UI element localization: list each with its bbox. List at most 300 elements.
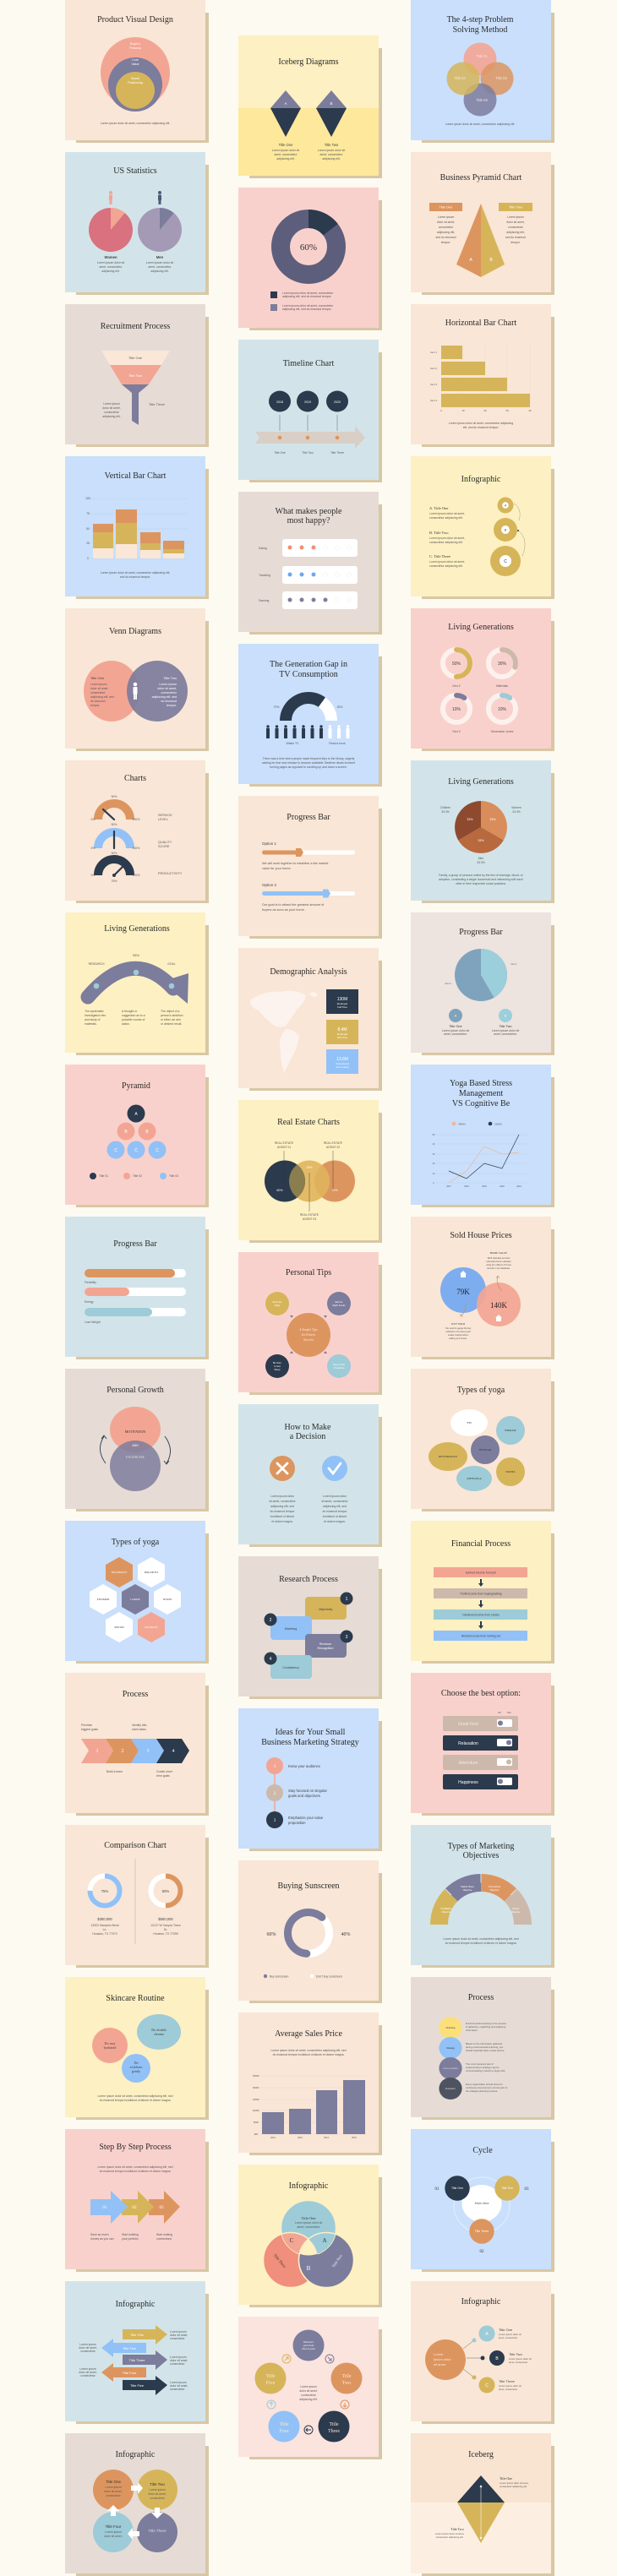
arrow descriptions: consectetur	[170, 2362, 185, 2366]
four circles: dolor sit amet,	[104, 2535, 123, 2538]
list: A. Title One	[429, 506, 448, 510]
addresses: $500,000	[158, 1917, 173, 1921]
chevron steps	[81, 1739, 189, 1763]
tip bubbles: to Get	[274, 1364, 281, 1368]
line chart: 2020	[500, 1185, 505, 1188]
descriptions: Lorem ipsum dolor	[270, 1495, 295, 1498]
bar chart	[253, 2074, 367, 2139]
iceberg B	[316, 90, 347, 137]
tip bubbles: Be Sure	[273, 1361, 281, 1364]
gauge: quality score: QUALITY	[158, 841, 172, 844]
segment labels: Objective	[463, 1888, 472, 1892]
iceberg B: B	[330, 101, 333, 106]
circle pyramid: A	[134, 1112, 138, 1117]
overlapping circles: AND	[132, 1444, 139, 1447]
list: C. Title Three	[429, 554, 450, 558]
funnel labels: Title Three	[149, 402, 166, 406]
agent labels: REAL ESTATE	[324, 1141, 343, 1145]
stage labels	[85, 954, 183, 1026]
descriptions: incididunt ut labore	[270, 1515, 294, 1518]
four circles: consectetur	[150, 2497, 166, 2500]
pie chart: Item 1	[511, 963, 517, 966]
title: Personal Growth	[106, 1386, 164, 1395]
overlapping circles: MOTIVATION	[125, 1430, 145, 1434]
title: Types of yoga	[457, 1386, 505, 1395]
line chart: 40	[433, 1143, 435, 1146]
nested ellipses: Buyer's	[130, 42, 140, 46]
labels: Title Three	[330, 451, 344, 455]
circle steps	[439, 2017, 462, 2099]
labels: adipiscing elit,	[437, 231, 455, 234]
center text: consectetur	[301, 2394, 317, 2397]
caption: do eiusmod tempor incididunt ut labore et dolore magna.	[100, 2099, 171, 2102]
stage labels: and study of	[85, 1018, 101, 1021]
gauge: productivity: 100%	[133, 874, 139, 877]
main bubble	[425, 2339, 466, 2380]
annotations: selling your house.	[449, 1337, 467, 1340]
cycle ring	[454, 2177, 510, 2233]
venn circles	[265, 1161, 355, 1201]
card: Average Sales Price	[238, 2012, 379, 2153]
pyramid	[456, 204, 505, 277]
pie labels: 33.3%	[441, 810, 450, 814]
bar chart: 2012	[270, 2136, 276, 2139]
gauge: quality score: 0%	[91, 847, 95, 850]
stacked bar chart: 100	[85, 497, 90, 500]
number badges	[264, 1592, 353, 1664]
bubbles: Do double	[151, 2028, 167, 2032]
option 1: We will work together to establish a fair market	[262, 862, 329, 865]
hexagon grid: IPSUM	[163, 1598, 172, 1601]
four overlapping circles: Title 03	[476, 98, 488, 102]
option rows: Great food	[458, 1722, 478, 1727]
venn circles: tempor.	[90, 704, 100, 707]
branches: amet, consectetur	[499, 2336, 517, 2339]
card: Charts	[65, 760, 205, 901]
cycle nodes: 02	[480, 2250, 484, 2254]
column header: NO	[498, 1711, 501, 1714]
step descriptions: information.	[466, 2029, 478, 2032]
segment labels: Profitability	[441, 1907, 452, 1910]
four overlapping circles	[446, 42, 514, 117]
labels: Title One	[439, 204, 453, 210]
card: Types of yoga blobs	[411, 1369, 551, 1509]
nested ellipses	[101, 37, 170, 112]
nested ellipses: Persona	[129, 46, 141, 50]
arrow descriptions: consectetur	[170, 2337, 185, 2340]
addresses: $300,000	[97, 1917, 112, 1921]
gauge: service level: 50%	[112, 795, 117, 798]
agent labels: REAL ESTATE	[300, 1213, 319, 1217]
half donut: 30%	[337, 705, 342, 709]
gauge: service level: LEVEL	[158, 818, 168, 821]
card: Business Pyramid Chart	[411, 152, 551, 292]
option 2: buyers as soon as your home.	[262, 908, 305, 912]
circle pyramid: C	[114, 1148, 117, 1153]
step labels: your portfolio	[122, 2237, 139, 2241]
direction icons	[267, 2355, 349, 2434]
center text: adipiscing elit.	[299, 2398, 318, 2401]
card: Infographic arrows	[65, 2281, 205, 2421]
legend circles	[442, 1009, 519, 1036]
descriptions: et dolore magna.	[324, 1520, 346, 1523]
caption	[271, 2049, 347, 2056]
caption: Lorem ipsum dolor sit amet, consectetur adipiscing	[449, 422, 513, 425]
step descriptions: the strategic planning process.	[466, 2089, 498, 2093]
title: Infographic	[461, 475, 501, 484]
gauge: quality score: 50%	[112, 823, 117, 826]
step labels: term goals	[156, 1774, 170, 1778]
donut: Millenials: Millenials	[496, 684, 508, 688]
arrow descriptions: consectetur	[170, 2388, 185, 2391]
card: Buying Sunscreen	[238, 1860, 379, 2001]
blobs: YIN	[467, 1421, 472, 1424]
legend: VBSM	[458, 1122, 466, 1125]
legend circles: amet, consectetur.	[494, 1032, 517, 1036]
bar chart: $150K	[253, 2098, 259, 2101]
labels: consectetur adipiscing elit.	[436, 2535, 464, 2539]
card: Types of Marketing Objectives	[411, 1825, 551, 1965]
blobs	[429, 1409, 525, 1491]
flow boxes: Profit income from buying/selling	[460, 1592, 502, 1595]
labels: Women	[104, 255, 117, 259]
legend: Lorem ipsum dolor sit amet, consectetur	[282, 291, 334, 295]
progress bars: Flexibility	[85, 1281, 96, 1284]
descriptions: sit amet, consectetur	[321, 1500, 349, 1503]
title: Progress Bar	[459, 928, 503, 937]
cycle circles: Title	[341, 2374, 352, 2379]
card: Choose the best option	[411, 1673, 551, 1813]
title: Vertical Bar Chart	[105, 471, 167, 481]
card: Living Generations donuts	[411, 608, 551, 749]
card: Cycle	[411, 2129, 551, 2269]
option rows: Relaxation	[458, 1741, 478, 1746]
bar chart: 2015	[352, 2136, 357, 2139]
icon: cross	[270, 1456, 295, 1481]
cycle circles: Title	[329, 2422, 339, 2427]
bubbles: Do stay	[105, 2041, 116, 2045]
option rows: Happiness	[458, 1780, 478, 1785]
chevron steps: 2	[122, 1749, 123, 1754]
bar chart: $50K	[254, 2121, 259, 2124]
price bubbles: 79K	[456, 1288, 470, 1296]
title: Infographic	[116, 2300, 156, 2309]
curved arrow	[88, 968, 188, 1004]
stat boxes: Unemployed	[336, 1062, 349, 1065]
annotations: indicators of a strong real	[445, 1330, 471, 1333]
venn circles: 70%	[331, 1189, 338, 1192]
step labels: Start making	[156, 2233, 172, 2236]
labels: adipiscing elit.	[101, 270, 120, 273]
pie labels: Children	[440, 806, 450, 809]
four overlapping circles: Title 02	[495, 76, 507, 80]
title	[450, 1079, 512, 1108]
legend circles: Title Two	[500, 1025, 511, 1028]
gauge: productivity: 75%	[112, 880, 117, 883]
three-circle venn: amet, consectetur	[298, 2225, 320, 2229]
step descriptions: communicating it clearly to begin with.	[466, 2069, 505, 2072]
pie chart: 33%	[478, 839, 484, 842]
card: Progress Bar options	[238, 796, 379, 936]
step descriptions	[466, 2022, 507, 2093]
segment labels: Growth	[512, 1907, 520, 1910]
title: Product Visual Design	[97, 15, 173, 25]
bar chart: Item 1	[430, 351, 437, 354]
branches: C	[485, 2383, 489, 2388]
labels: Title One	[500, 2476, 512, 2481]
funnel	[101, 351, 170, 425]
labels: Title Two	[302, 451, 314, 455]
flow boxes: Dividend income from stocks	[462, 1614, 500, 1617]
annotations: estimated home valuation	[486, 1260, 511, 1263]
nested ellipses: Core	[132, 58, 139, 62]
caption: do eiusmod tempor incididunt ut labore et dolore magna.	[273, 2053, 344, 2056]
title: Comparison Chart	[104, 1841, 167, 1850]
cycle nodes: 03	[524, 2187, 529, 2192]
numbered list: 3	[274, 1819, 276, 1823]
pie labels: Men	[478, 857, 483, 860]
numbered list: Stay focused on singular	[288, 1789, 327, 1793]
title: How to Make	[284, 1423, 331, 1432]
caption: Lorem ipsum dolor sit amet, consectetur adipiscing elit, sed	[271, 2049, 347, 2052]
labels: sed do eiusmod	[436, 236, 456, 239]
caption	[101, 571, 170, 579]
progress bars	[85, 1269, 186, 1324]
list: consectetur adipiscing elit.	[429, 541, 463, 544]
world map	[250, 991, 318, 1073]
line chart: 50	[433, 1134, 435, 1136]
title: Iceberg Diagrams	[278, 57, 339, 67]
labels: dolor sit amet,	[506, 221, 525, 224]
cycle circles: Discover	[303, 2340, 314, 2344]
card: 4-step Problem Solving	[411, 0, 551, 140]
option 2: Option 2	[262, 883, 277, 887]
title: US Statistics	[113, 166, 157, 176]
rating rows: Eating	[259, 547, 267, 550]
legend: Title 02	[133, 1174, 142, 1178]
descriptions: Title One	[279, 143, 293, 147]
labels: Title One	[274, 451, 286, 455]
venn circles: Lorem ipsum	[159, 683, 177, 686]
labels: Men	[156, 255, 164, 259]
gauge: service level	[91, 795, 172, 821]
card: Generation Gap in TV Consumption	[238, 644, 379, 784]
title: Venn Diagrams	[109, 627, 161, 636]
three-circle venn: Title One	[302, 2216, 315, 2220]
white arrows	[107, 2482, 163, 2540]
arrow descriptions: Lorem ipsum	[170, 2355, 187, 2359]
branches: Lorem ipsum dolor sit	[499, 2333, 521, 2336]
bar chart: $100K	[253, 2109, 259, 2112]
center bubble: 4 Simple Tips	[299, 1328, 318, 1332]
flow boxes	[434, 1567, 527, 1641]
descriptions	[272, 143, 345, 161]
year circles: 2018	[276, 400, 283, 404]
four circles: Title Three	[148, 2529, 167, 2533]
donut: Gen X: 10%	[452, 707, 461, 712]
circle pyramid: B	[124, 1130, 128, 1135]
title: Types of Marketing	[448, 1842, 514, 1851]
title	[270, 660, 347, 679]
segment labels	[441, 1885, 521, 1914]
donut chart	[267, 1910, 350, 1956]
legend	[270, 291, 334, 311]
labels: Lorem ipsum dolor sit	[146, 261, 173, 264]
step descriptions: Environmental scanning is the process	[466, 2022, 506, 2025]
ring circles: C	[504, 559, 507, 564]
legend: Buy sunscreen	[270, 1975, 289, 1979]
title: most happy?	[287, 516, 330, 526]
blobs: IYENGAR	[479, 1448, 492, 1451]
overlapping circles: EXCERCISE	[126, 1455, 145, 1459]
descriptions: adipiscing elit.	[276, 157, 295, 161]
title: VS Cognitive Be	[452, 1099, 511, 1108]
stat boxes: Employed	[337, 1032, 348, 1036]
caption: elit, sed do eiusmod tempor.	[463, 426, 499, 429]
labels	[274, 451, 344, 455]
process boxes: Matching	[285, 1627, 297, 1631]
gauge: quality score	[91, 823, 172, 850]
tip bubbles: Right Foods	[332, 1304, 346, 1307]
title: Infographic	[289, 2181, 329, 2191]
circle pyramid: B	[145, 1130, 149, 1135]
half donut: 70%	[274, 705, 279, 709]
descriptions: amet, consectetur	[275, 153, 298, 156]
stat boxes: 8.4M	[337, 1027, 347, 1032]
chevron steps: 1	[96, 1749, 98, 1754]
title: a Decision	[290, 1432, 325, 1441]
card: Living Generations arrow	[65, 912, 205, 1053]
list: consectetur adipiscing elit.	[429, 516, 463, 520]
annotations: estate market before	[448, 1333, 468, 1337]
bar chart: 40	[528, 409, 532, 412]
arrow descriptions: dolor sit amet,	[170, 2334, 188, 2337]
card: Iceberg	[411, 2433, 551, 2573]
pie labels: 33.3%	[477, 861, 485, 864]
process boxes: Recognition	[318, 1647, 333, 1650]
three-circle venn: Title Two	[331, 2253, 343, 2268]
labels: consectetur adipiscing elit.	[500, 2485, 527, 2488]
center text	[299, 2385, 318, 2401]
cycle nodes: Title One	[451, 2187, 463, 2190]
circle steps: Strategy	[446, 2046, 456, 2050]
venn circles: Lorem ipsum	[90, 683, 107, 686]
stat boxes: Employed	[337, 1002, 348, 1005]
title: Progress Bar	[287, 813, 330, 822]
cycle circles: Three	[328, 2429, 340, 2434]
cycle nodes: 01	[434, 2187, 440, 2192]
numbered list: Know your audience	[288, 1764, 321, 1768]
agent labels: AGENT 03	[303, 1217, 316, 1221]
step descriptions: The most important part of	[466, 2062, 494, 2066]
descriptions: amet, consectetur	[320, 153, 343, 156]
branches: amet, consectetur	[499, 2388, 517, 2391]
bubbles: gently	[132, 2069, 141, 2073]
tip bubbles: Daily	[275, 1304, 281, 1307]
legend circles: Lorem ipsum dolor sit	[492, 1029, 519, 1032]
column header: YES	[506, 1711, 511, 1714]
segment labels: Objective	[442, 1910, 451, 1914]
branches: Title Three	[499, 2379, 516, 2383]
caption: Lorem ipsum dolor sit amet, consectetur adipiscing elit, sed	[98, 2094, 173, 2098]
card: Timeline Chart	[238, 340, 379, 480]
cycle circles: time to post	[302, 2347, 315, 2350]
cycle circles: Title	[279, 2422, 289, 2427]
four circles: Title One	[106, 2480, 122, 2484]
cycle circles	[255, 2330, 362, 2442]
option 1: Option 1	[262, 841, 277, 846]
list: B. Title Two	[429, 531, 449, 535]
agent labels: REAL ESTATE	[275, 1141, 294, 1145]
three-circle venn: A	[322, 2237, 327, 2244]
stacked bar chart: 25	[86, 542, 90, 545]
donut: Gen Z: Gen Z	[452, 684, 461, 688]
addresses: Houston, TX 77070	[92, 1932, 117, 1936]
annotations: records in our database.	[487, 1266, 511, 1270]
branches: Lorem ipsum dolor sit	[499, 2384, 521, 2388]
caption: Lorem ipsum dolor sit amet, consectetur adipiscing elit.	[101, 122, 170, 125]
title: Business Pyramid Chart	[440, 173, 522, 182]
water background	[411, 2502, 551, 2573]
step descriptions: should hopefully have a clear picture.	[466, 2049, 505, 2052]
arrow descriptions: consectetur	[80, 2350, 96, 2353]
legend circles: A	[455, 1014, 457, 1017]
cycle nodes: Title Three	[475, 2230, 489, 2233]
circle pyramid: C	[156, 1148, 159, 1153]
pie chart: 33%	[467, 818, 473, 821]
funnel labels: adipiscing elit.	[102, 415, 121, 418]
stage labels: The object of a	[161, 1010, 180, 1013]
agent labels: AGENT 01	[277, 1146, 291, 1149]
venn circles: adipiscing elit, sed	[152, 695, 177, 699]
option 1	[262, 841, 355, 870]
card: Skincare Routine	[65, 1977, 205, 2117]
title: Infographic	[116, 2450, 156, 2459]
hexagon grid: EIUSMOD	[97, 1598, 110, 1601]
title	[276, 507, 342, 526]
caption	[444, 1937, 519, 1945]
bar chart: $200K	[253, 2086, 259, 2089]
stat boxes: Part-Time	[337, 1036, 348, 1039]
bar chart: 10	[461, 409, 465, 412]
flow boxes: Rental income from renting out	[461, 1634, 500, 1637]
flow boxes: Earned income from job	[466, 1571, 496, 1575]
process boxes: Revenue	[319, 1642, 331, 1646]
segment labels: Objective	[511, 1910, 521, 1914]
venn circles: dolor sit amet,	[157, 687, 177, 690]
iceberg A: A	[284, 101, 287, 106]
donut: Gen X	[443, 695, 470, 733]
caption: Family, a group of persons united by the ties of marriage, blood, or	[439, 874, 524, 877]
card: Progress Bar pie	[411, 912, 551, 1053]
annotations: You need to gauge the key	[445, 1326, 472, 1330]
labels: Title Two	[509, 204, 523, 210]
bar chart: 0	[440, 409, 442, 412]
people icons: Watch TV	[287, 742, 299, 745]
donut 50%: 50%	[162, 1889, 169, 1893]
caption: do eiusmod tempor incididunt ut labore et dolore magna.	[445, 1942, 516, 1945]
blobs: RESTORATIVE	[439, 1455, 457, 1458]
labels: Lorem ipsum dolor sit amet,	[500, 2481, 529, 2485]
donut: Generation Jones: 10%	[498, 707, 507, 712]
step labels	[90, 2233, 172, 2241]
card: cycle of circles	[238, 2317, 379, 2457]
cycle circles: Five	[266, 2381, 276, 2386]
center bubble: Success	[303, 1338, 314, 1342]
funnel labels: dolor sit amet,	[102, 406, 121, 410]
bubbles: Do	[134, 2061, 139, 2065]
title: Skincare Routine	[106, 1994, 165, 2003]
